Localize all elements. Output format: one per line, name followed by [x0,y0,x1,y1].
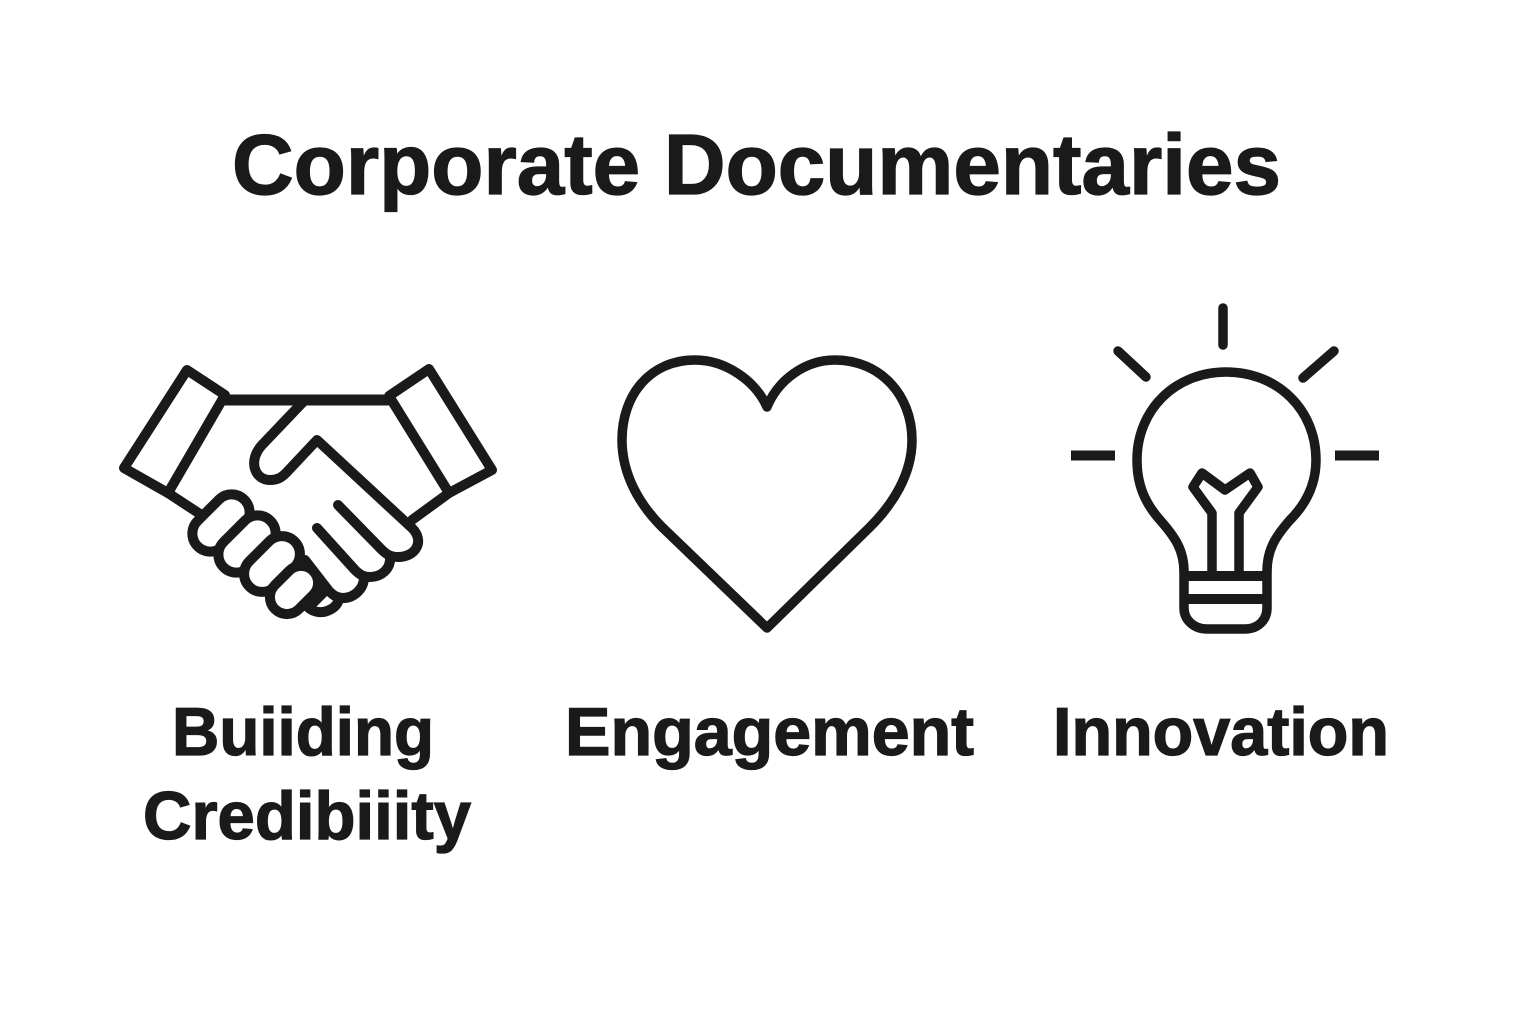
label: Building Credibility: Buiiding [172,694,434,770]
label: Building Credibility [143,694,471,854]
label: Innovation: Innovation [1053,694,1389,770]
icon: heart [622,360,912,628]
label: Engagement: Engagement [565,694,974,770]
icon: light bulb [1071,308,1379,629]
label: Building Credibility: Credibiiity [143,778,471,854]
title: Corporate Documentaries [232,118,1281,213]
icon: handshake [124,369,492,621]
